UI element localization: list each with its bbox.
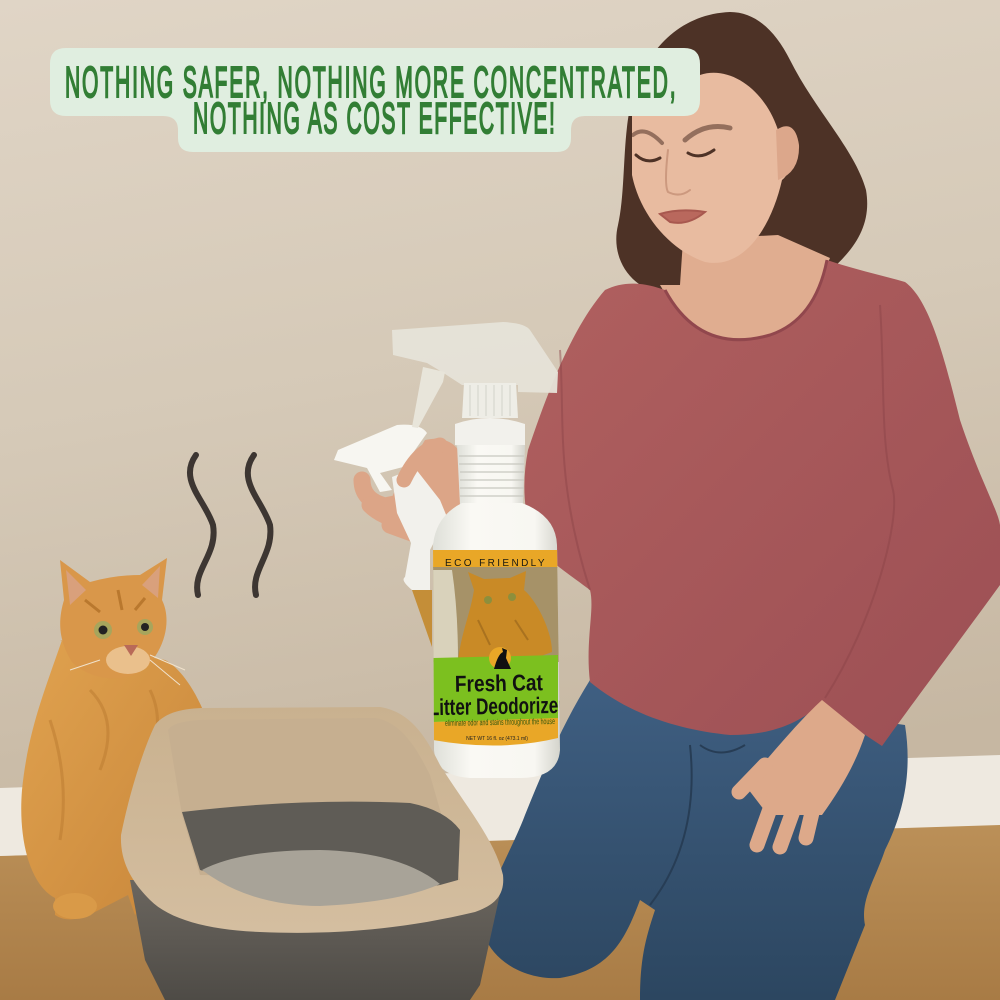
odor waves xyxy=(190,455,270,595)
litter xyxy=(202,850,440,906)
woman xyxy=(362,12,1000,1000)
inner wall xyxy=(168,718,460,880)
bottle collar xyxy=(455,418,525,448)
large spray bottle xyxy=(392,322,565,778)
cat badge xyxy=(489,647,511,669)
bottle body xyxy=(433,503,560,778)
floor xyxy=(0,824,1000,1000)
sleeve shading xyxy=(560,305,894,698)
facial features xyxy=(633,126,730,223)
bubble shape xyxy=(50,48,700,152)
bottle label xyxy=(429,550,565,746)
face xyxy=(632,73,790,263)
baseboard xyxy=(0,755,1000,856)
neck and chest xyxy=(660,235,830,352)
cat head xyxy=(60,558,167,678)
litter box xyxy=(121,707,503,1000)
bottle label: NET WT 16 fl. oz (473.1 ml) xyxy=(466,736,528,742)
cat xyxy=(21,558,203,919)
shirt and arm xyxy=(524,260,1000,746)
label photo xyxy=(430,567,562,662)
ear xyxy=(776,126,799,180)
tray base xyxy=(130,880,503,1000)
bottle label: Fresh Cat xyxy=(455,669,543,697)
cat muzzle xyxy=(106,646,150,674)
bottle neck xyxy=(457,445,525,505)
thumb xyxy=(404,445,440,480)
cat body xyxy=(21,640,203,919)
bottle label: eliminate odor and stains throughout the house xyxy=(445,716,555,728)
label text: ECO FRIENDLY xyxy=(445,558,547,569)
right hand on knee xyxy=(739,700,865,847)
small spray bottle xyxy=(334,425,447,647)
speech bubble heading: NOTHING AS COST EFFECTIVE! xyxy=(193,95,555,143)
inner tray xyxy=(182,802,460,892)
bottle cap xyxy=(462,383,518,418)
cat eyes xyxy=(94,621,112,639)
rim xyxy=(121,707,503,933)
collar xyxy=(665,260,827,340)
holding hand xyxy=(362,439,462,536)
bottle label: Litter Deodorizer xyxy=(429,692,565,720)
translucent sprayer xyxy=(392,322,558,393)
jeans xyxy=(484,680,908,1000)
headline text: NOTHING SAFER, NOTHING MORE CONCENTRATED, xyxy=(65,59,676,107)
speech bubble heading xyxy=(50,48,700,152)
hair xyxy=(616,12,867,290)
